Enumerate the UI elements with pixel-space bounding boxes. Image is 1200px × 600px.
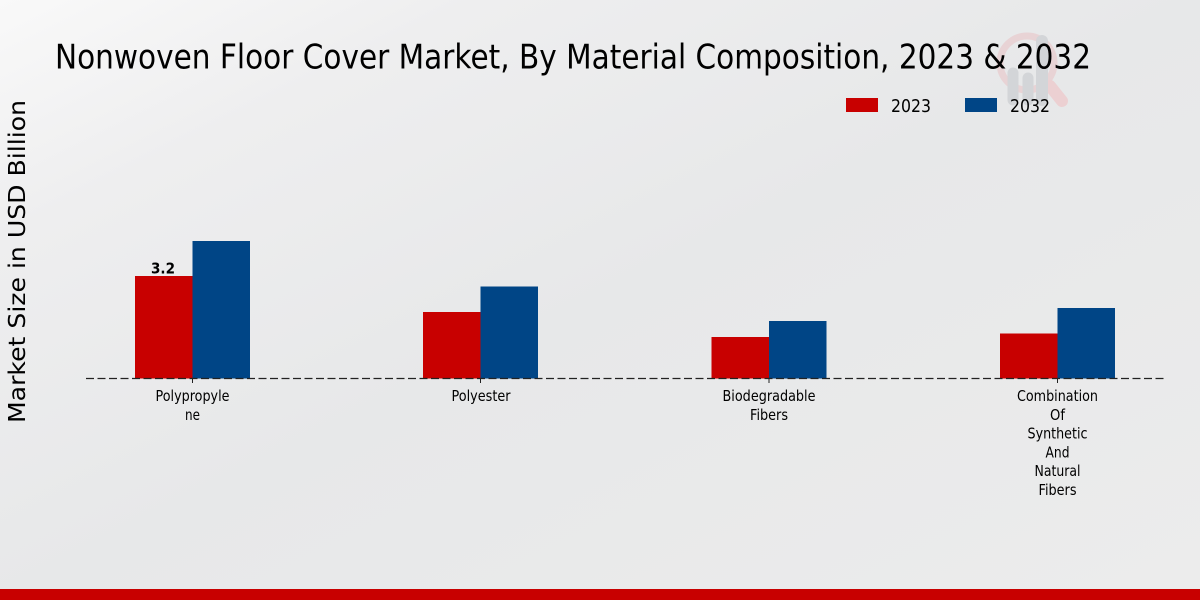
legend: 2023: 2023: [891, 96, 931, 117]
category label: Combination Of Synthetic And Natural Fibers: And: [1046, 443, 1070, 461]
value label: 3.2: [151, 260, 175, 278]
legend: 2023: [846, 96, 931, 117]
y axis label: Market Size in USD Billion: [5, 100, 31, 423]
axis baseline: [86, 378, 1164, 380]
category label: Polypropylene: [156, 387, 230, 424]
bars: Polyester: [423, 286, 538, 378]
axis ticks: [192, 379, 1058, 383]
category label: Polyester: Polyester: [452, 387, 511, 405]
category label: Biodegradable Fibers: Biodegradable: [722, 387, 816, 405]
category label: Combination Of Synthetic And Natural Fibers: Synthetic: [1028, 425, 1088, 443]
bars: Combination: [1000, 308, 1115, 378]
category label: Biodegradable Fibers: [722, 387, 816, 424]
category label: Combination Of Synthetic And Natural Fibers: Fibers: [1038, 481, 1077, 499]
legend: 2032: 2032: [1010, 96, 1050, 117]
legend: 2032: [965, 96, 1050, 117]
category label: Combination Of Synthetic And Natural Fibers: Combination: [1017, 387, 1098, 405]
category label: Combination Of Synthetic And Natural Fibers: Of: [1050, 406, 1066, 424]
category label: Polypropylene: Polypropyle: [156, 387, 230, 405]
watermark logo: [1000, 36, 1062, 101]
bottom bar: [0, 589, 1200, 600]
category label: Combination Of Synthetic And Natural Fibers: Natural: [1034, 462, 1080, 480]
legend: [846, 96, 1050, 117]
bars: Biodegradable Fibers: [712, 321, 826, 378]
category label: Polypropylene: ne: [185, 406, 200, 424]
category label: Combination Of Synthetic And Natural Fibers: [1017, 387, 1098, 499]
bars: Polypropylene: [135, 241, 250, 378]
bar chart: [86, 241, 1164, 383]
category label: Biodegradable Fibers: Fibers: [750, 406, 788, 424]
